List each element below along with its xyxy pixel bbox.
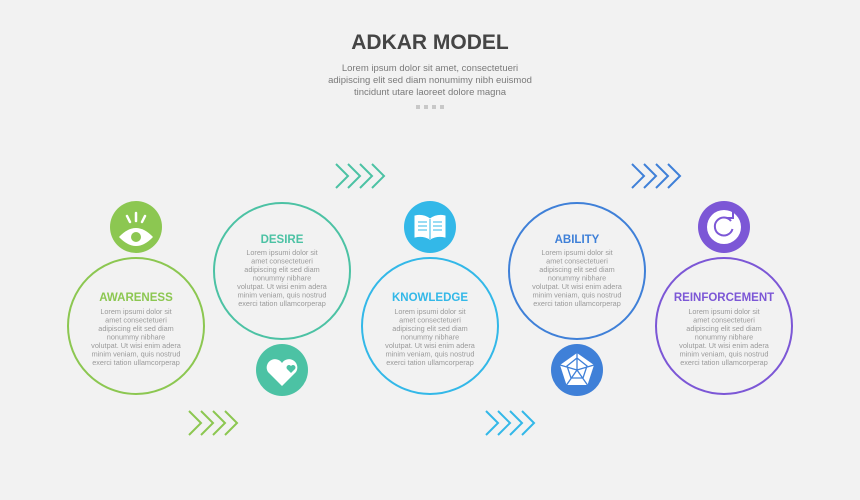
panel: reinforcement: [656, 258, 792, 394]
icon: refresh: [698, 201, 750, 253]
panel: ability: nonummy nibhare: [548, 274, 606, 282]
panel: awareness: adipiscing elit sed diam: [98, 324, 174, 333]
panel: awareness: Lorem ipsumi dolor sit: [100, 307, 172, 316]
icon: book: [404, 201, 456, 253]
arrow: chevrons cyan bottom: [486, 411, 534, 435]
panel: ability: minim veniam, quis nostrud: [533, 290, 621, 300]
panel: reinforcement: volutpat. Ut wisi enim adera: [679, 341, 770, 350]
icon: heart: [256, 344, 308, 396]
panel: desire: [214, 203, 350, 339]
panel: desire: amet consectetueri: [251, 256, 313, 266]
panel: awareness: nonummy nibhare: [107, 332, 165, 342]
panel: awareness: volutpat. Ut wisi enim adera: [91, 341, 182, 350]
panel: reinforcement: REINFORCEMENT: [674, 292, 774, 304]
panel: desire: Lorem ipsumi dolor sit: [246, 248, 318, 257]
panel: desire: exerci tation ullamcorperap: [238, 299, 326, 308]
subtitle: [328, 63, 532, 98]
subtitle: adipiscing elit sed diam nonumimy nibh euismod: [328, 75, 532, 86]
panel: knowledge: KNOWLEDGE: [392, 292, 468, 304]
panel: knowledge: volutpat. Ut wisi enim adera: [385, 341, 476, 350]
subtitle: tincidunt utare laoreet dolore magna: [354, 87, 507, 98]
panel: knowledge: Lorem ipsumi dolor sit: [394, 307, 466, 316]
panel: ability: [509, 203, 645, 339]
panel: desire: nonummy nibhare: [253, 274, 311, 282]
title: ADKAR MODEL: [351, 31, 509, 54]
panel: reinforcement: nonummy nibhare: [695, 332, 753, 342]
panel: knowledge: minim veniam, quis nostrud: [386, 350, 474, 358]
panel: knowledge: [362, 258, 498, 394]
icon: eye: [110, 201, 162, 253]
arrow: chevrons blue top: [632, 164, 680, 188]
panel: desire: adipiscing elit sed diam: [244, 265, 320, 274]
panel: ability: adipiscing elit sed diam: [539, 265, 615, 274]
panel: awareness: [68, 258, 204, 394]
arrow: chevrons teal top: [336, 164, 384, 188]
panel: reinforcement: Lorem ipsumi dolor sit: [688, 307, 760, 316]
panel: awareness: amet consectetueri: [105, 316, 167, 324]
panel: reinforcement: exerci tation ullamcorperap: [680, 358, 768, 367]
panel: reinforcement: amet consectetueri: [693, 316, 755, 324]
panel: desire: minim veniam, quis nostrud: [238, 290, 326, 300]
panel: knowledge: adipiscing elit sed diam: [392, 324, 468, 333]
panel: knowledge: exerci tation ullamcorperap: [386, 358, 474, 367]
panel: ability: exerci tation ullamcorperap: [533, 299, 621, 308]
panel: knowledge: amet consectetueri: [399, 316, 461, 324]
panel: awareness: minim veniam, quis nostrud: [92, 350, 180, 358]
panel: ability: Lorem ipsumi dolor sit: [541, 248, 613, 257]
panel: awareness: AWARENESS: [99, 292, 173, 304]
panel: desire: DESIRE: [261, 234, 304, 246]
panel: reinforcement: adipiscing elit sed diam: [686, 324, 762, 333]
panel: desire: volutpat. Ut wisi enim adera: [237, 282, 328, 291]
icon: pentagon chart: [551, 344, 603, 396]
arrow: chevrons green bottom: [189, 411, 237, 435]
dots: [416, 105, 444, 109]
panel: knowledge: nonummy nibhare: [401, 332, 459, 342]
subtitle: Lorem ipsum dolor sit amet, consectetueri: [342, 63, 518, 74]
panel: awareness: exerci tation ullamcorperap: [92, 358, 180, 367]
panel: ability: amet consectetueri: [546, 256, 608, 266]
panel: reinforcement: minim veniam, quis nostrud: [680, 350, 768, 358]
panel: ability: ABILITY: [555, 234, 600, 246]
panel: ability: volutpat. Ut wisi enim adera: [532, 282, 623, 291]
